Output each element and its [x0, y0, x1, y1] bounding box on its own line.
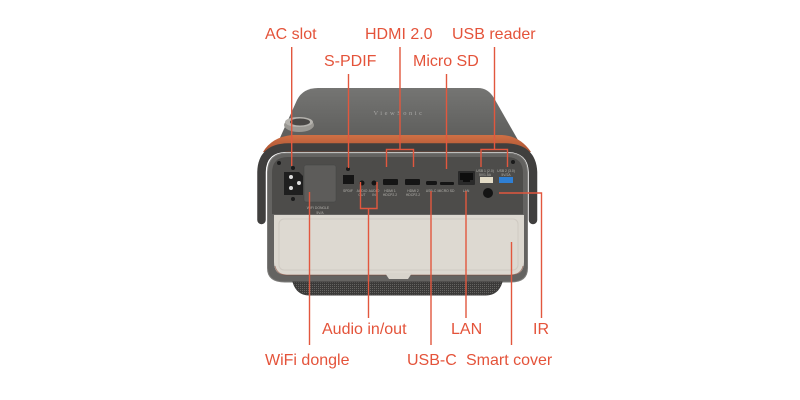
USB ports and IR sensor: USB 2 (3.0) — [497, 169, 515, 173]
panel screws — [277, 160, 515, 165]
label: Audio in/out: Audio in/out — [322, 321, 407, 338]
USB-C and Micro SD ports: MICRO SD — [438, 189, 455, 193]
WiFi dongle bay: WIFI DONGLE — [307, 206, 330, 210]
copper band — [263, 135, 531, 152]
HDMI ports: HDCP2.2 — [383, 193, 397, 197]
audio jacks: OUT — [358, 193, 366, 197]
HDMI ports: HDMI 1 — [384, 189, 396, 193]
audio jacks: IN — [372, 193, 376, 197]
audio jacks — [357, 180, 380, 197]
label: USB-C: USB-C — [407, 352, 457, 369]
S-PDIF port: SPDIF — [343, 189, 353, 193]
LAN port — [458, 171, 475, 193]
label: LAN: LAN — [451, 321, 482, 338]
label: Micro SD: Micro SD — [413, 53, 479, 70]
leader lines — [292, 47, 542, 345]
smart cover — [274, 215, 524, 275]
label: S-PDIF: S-PDIF — [324, 53, 377, 70]
USB ports and IR sensor: 5V/2A — [501, 173, 511, 177]
WiFi dongle bay: 5V/A — [316, 211, 324, 215]
HDMI ports: HDMI 2 — [407, 189, 419, 193]
cover inset — [279, 219, 518, 270]
brand mark: ViewSonic — [374, 110, 424, 117]
AC inlet — [284, 166, 303, 201]
label: IR: IR — [533, 321, 549, 338]
label: Smart cover: Smart cover — [466, 352, 553, 369]
USB ports and IR sensor: USB 1 (2.0) — [476, 169, 494, 173]
audio jacks: AUDIO — [357, 189, 368, 193]
label: USB reader: USB reader — [452, 26, 536, 43]
projector body — [262, 88, 533, 295]
LAN port: LAN — [463, 189, 470, 193]
HDMI ports: HDCP2.2 — [406, 193, 420, 197]
HDMI ports — [383, 179, 420, 197]
audio jacks: AUDIO — [369, 189, 380, 193]
label: WiFi dongle: WiFi dongle — [265, 352, 350, 369]
port panel — [272, 157, 523, 214]
label: AC slot: AC slot — [265, 26, 317, 43]
focus dial — [284, 117, 314, 132]
top housing — [279, 88, 518, 140]
USB-C and Micro SD ports — [426, 181, 455, 193]
S-PDIF port — [343, 167, 354, 193]
cover tab — [385, 273, 412, 279]
label: HDMI 2.0: HDMI 2.0 — [365, 26, 433, 43]
WiFi dongle bay — [304, 165, 336, 215]
USB-C and Micro SD ports: USB-C — [426, 189, 437, 193]
cover lower edge — [275, 266, 523, 275]
speaker grille — [293, 282, 502, 295]
rear frame — [268, 153, 528, 282]
handle frame — [262, 148, 533, 220]
USB ports and IR sensor — [476, 169, 515, 198]
USB ports and IR sensor: 5V/1.5A — [479, 173, 492, 177]
